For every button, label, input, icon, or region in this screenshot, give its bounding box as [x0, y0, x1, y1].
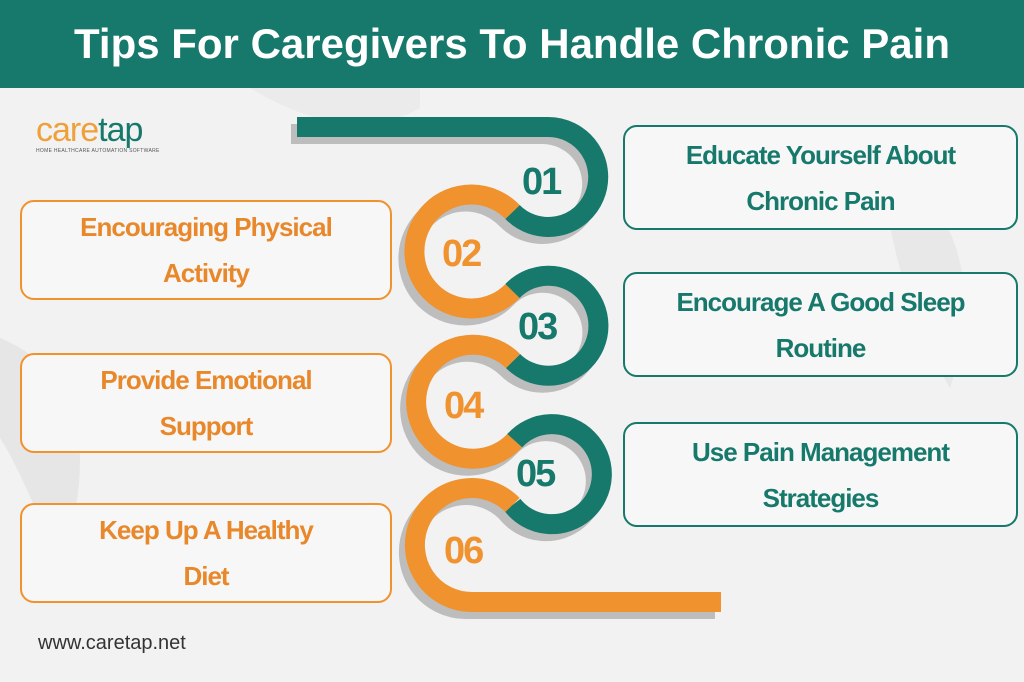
numbers: 03: [518, 306, 557, 348]
box: educate: Chronic Pain: [746, 186, 895, 216]
box: physical activity: Encouraging Physical: [80, 212, 332, 242]
numbers: [442, 161, 562, 572]
box: sleep: Routine: [776, 332, 865, 362]
box: healthy diet: Diet: [183, 561, 229, 591]
title: Tips For Caregivers To Handle Chronic Pain: [74, 20, 950, 67]
numbers: 04: [444, 385, 484, 427]
box: healthy diet: [20, 503, 392, 603]
logo: caretap: [36, 111, 142, 149]
logo: HOME HEALTHCARE AUTOMATION SOFTWARE: [36, 148, 160, 154]
box: educate: Educate Yourself About: [686, 140, 955, 170]
box: healthy diet: Keep Up A Healthy: [99, 515, 313, 545]
box: pain management: Strategies: [763, 482, 878, 512]
numbers: 06: [444, 530, 483, 572]
box: educate: [623, 125, 1018, 230]
website: www.caretap.net: [38, 632, 186, 654]
box: physical activity: Activity: [163, 258, 249, 288]
box: sleep: Encourage A Good Sleep: [676, 286, 965, 316]
box: emotional support: Support: [160, 411, 252, 441]
box: emotional support: [20, 353, 392, 453]
box: pain management: [623, 422, 1018, 527]
box: emotional support: Provide Emotional: [100, 365, 312, 395]
numbers: 05: [516, 453, 556, 495]
box: sleep: [623, 272, 1018, 377]
title: [0, 0, 1024, 88]
box: pain management: Use Pain Management: [692, 436, 949, 466]
numbers: 02: [442, 233, 481, 275]
box: physical activity: [20, 200, 392, 300]
numbers: 01: [522, 161, 562, 203]
